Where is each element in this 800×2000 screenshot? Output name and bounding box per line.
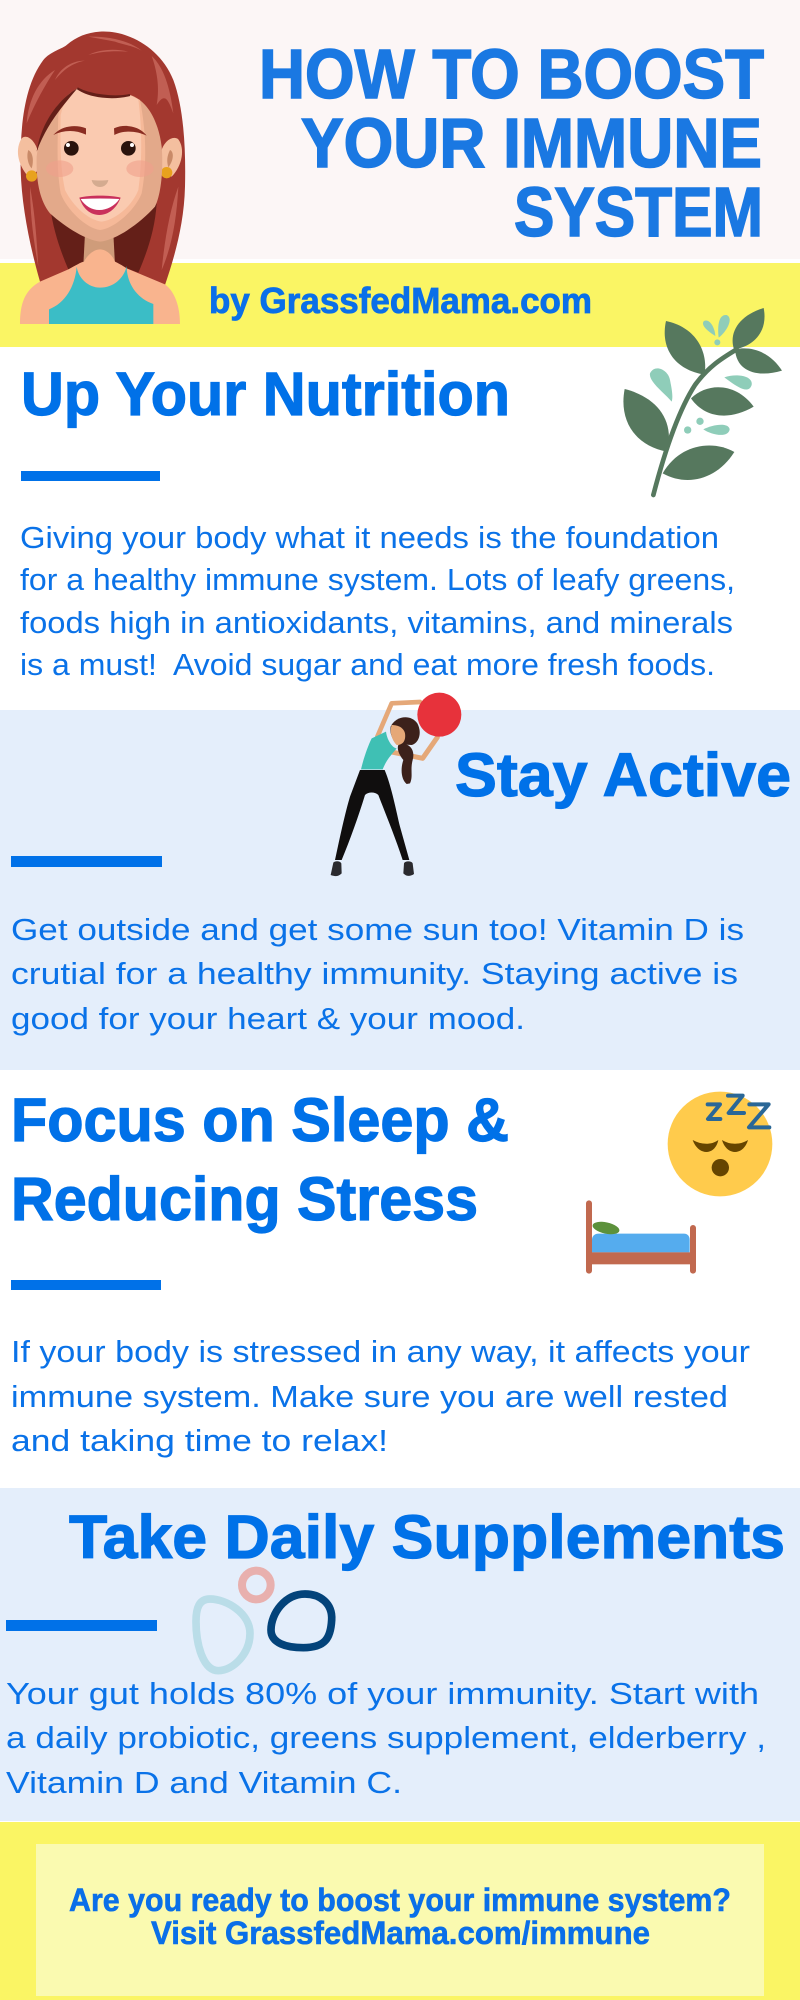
body text: Giving your body what it needs is the foundation: [20, 520, 719, 555]
heading: focus on sleep and reducing stress: Reducing Stress: [11, 1165, 478, 1233]
body text: immune system. Make sure you are well rested: [11, 1379, 728, 1414]
title: [259, 35, 764, 251]
divider rule: [11, 856, 162, 867]
panel: focus on sleep: [11, 1086, 772, 1458]
body text: [6, 1676, 766, 1800]
panel: up your nutrition: [20, 308, 782, 682]
title: HOW TO BOOST: [259, 35, 764, 113]
title: YOUR IMMUNE: [301, 104, 762, 182]
heading: stay active: Stay Active: [455, 741, 791, 809]
body text: is a must! Avoid sugar and eat more fresh foods.: [20, 647, 715, 682]
body text: crutial for a healthy immunity. Staying active is: [11, 956, 738, 991]
panel: header: [0, 0, 800, 347]
divider rule: [21, 471, 160, 481]
icon: sleeping face: [668, 1092, 772, 1196]
panel: footer call to action: [0, 1822, 800, 2000]
callout box: [36, 1844, 764, 1996]
body text: for a healthy immune system. Lots of leafy greens,: [20, 562, 735, 597]
heading: up your nutrition: Up Your Nutrition: [21, 360, 510, 428]
body text: Get outside and get some sun too! Vitamin D is: [11, 912, 744, 947]
icon: leafy branch: [623, 308, 782, 495]
byline: by GrassfedMama.com: [209, 280, 592, 321]
heading: focus on sleep and reducing stress: [11, 1086, 509, 1233]
divider rule: [6, 1620, 157, 1631]
callout text: [69, 1882, 731, 1951]
divider rule: [11, 1280, 161, 1290]
icon: rings: [196, 1571, 332, 1671]
icon: bed: [586, 1200, 696, 1274]
body text: If your body is stressed in any way, it affects your: [11, 1334, 750, 1369]
body text: a daily probiotic, greens supplement, elderberry ,: [6, 1720, 766, 1755]
body text: Vitamin D and Vitamin C.: [6, 1765, 402, 1800]
body text: foods high in antioxidants, vitamins, and minerals: [20, 605, 733, 640]
body text: [11, 912, 744, 1036]
title: SYSTEM: [514, 173, 763, 251]
body text: Your gut holds 80% of your immunity. Start with: [6, 1676, 759, 1711]
body text: and taking time to relax!: [11, 1423, 388, 1458]
heading: focus on sleep and reducing stress: Focus on Sleep &: [11, 1086, 509, 1154]
panel: stay active: [0, 693, 800, 1070]
icon: woman portrait: [18, 32, 185, 324]
icon: woman stretching with ball: [331, 693, 461, 876]
body text: good for your heart & your mood.: [11, 1001, 525, 1036]
heading: take daily supplements: Take Daily Supplements: [69, 1503, 785, 1571]
body text: [11, 1334, 750, 1458]
panel: take daily supplements: [0, 1488, 800, 1821]
body text: [20, 520, 735, 682]
callout text: Visit GrassfedMama.com/immune: [151, 1915, 650, 1951]
callout text: Are you ready to boost your immune system?: [69, 1882, 731, 1918]
ears: [18, 137, 182, 177]
